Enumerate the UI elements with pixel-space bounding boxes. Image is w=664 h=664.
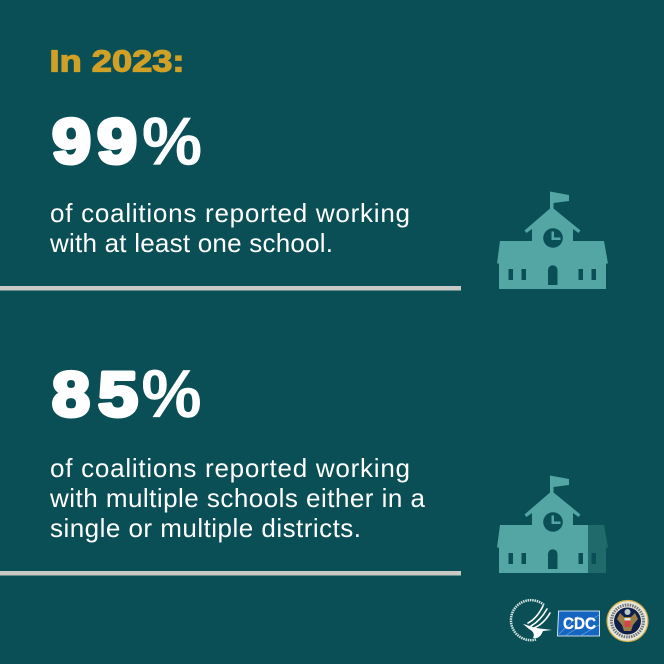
statistic: 99%: 9: [97, 107, 137, 177]
logo: CDC: [558, 611, 600, 636]
text block: 99% description: of coalitions reported working: [50, 198, 410, 228]
statistic: 99%: 9: [52, 107, 91, 177]
logo: US seal: [607, 600, 648, 642]
text block: 85% description: single or multiple districts.: [50, 513, 361, 543]
icon: school building, full: [497, 192, 608, 289]
statistic: 85%: [52, 356, 202, 432]
statistic: 85%: 8: [52, 360, 90, 430]
text block: 85% description: of coalitions reported working: [50, 453, 410, 483]
statistic: 99%: [52, 104, 202, 180]
icon: school building, partly shaded: [497, 476, 608, 573]
logo: CDC: CDC: [563, 614, 596, 633]
text block: 99% description: [49, 198, 410, 258]
text block: 85% description: with multiple schools either in a: [49, 483, 426, 513]
statistic: 85%: %: [142, 356, 202, 432]
logo: HHS: [511, 600, 552, 640]
heading: In 2023: In 2023:: [50, 44, 184, 78]
divider line: [0, 286, 461, 290]
text block: 99% description: with at least one school.: [49, 228, 333, 258]
text block: 85% description: [49, 453, 426, 543]
divider line: [0, 571, 461, 576]
statistic: 85%: 5: [98, 360, 138, 430]
statistic: 99%: %: [142, 104, 202, 180]
